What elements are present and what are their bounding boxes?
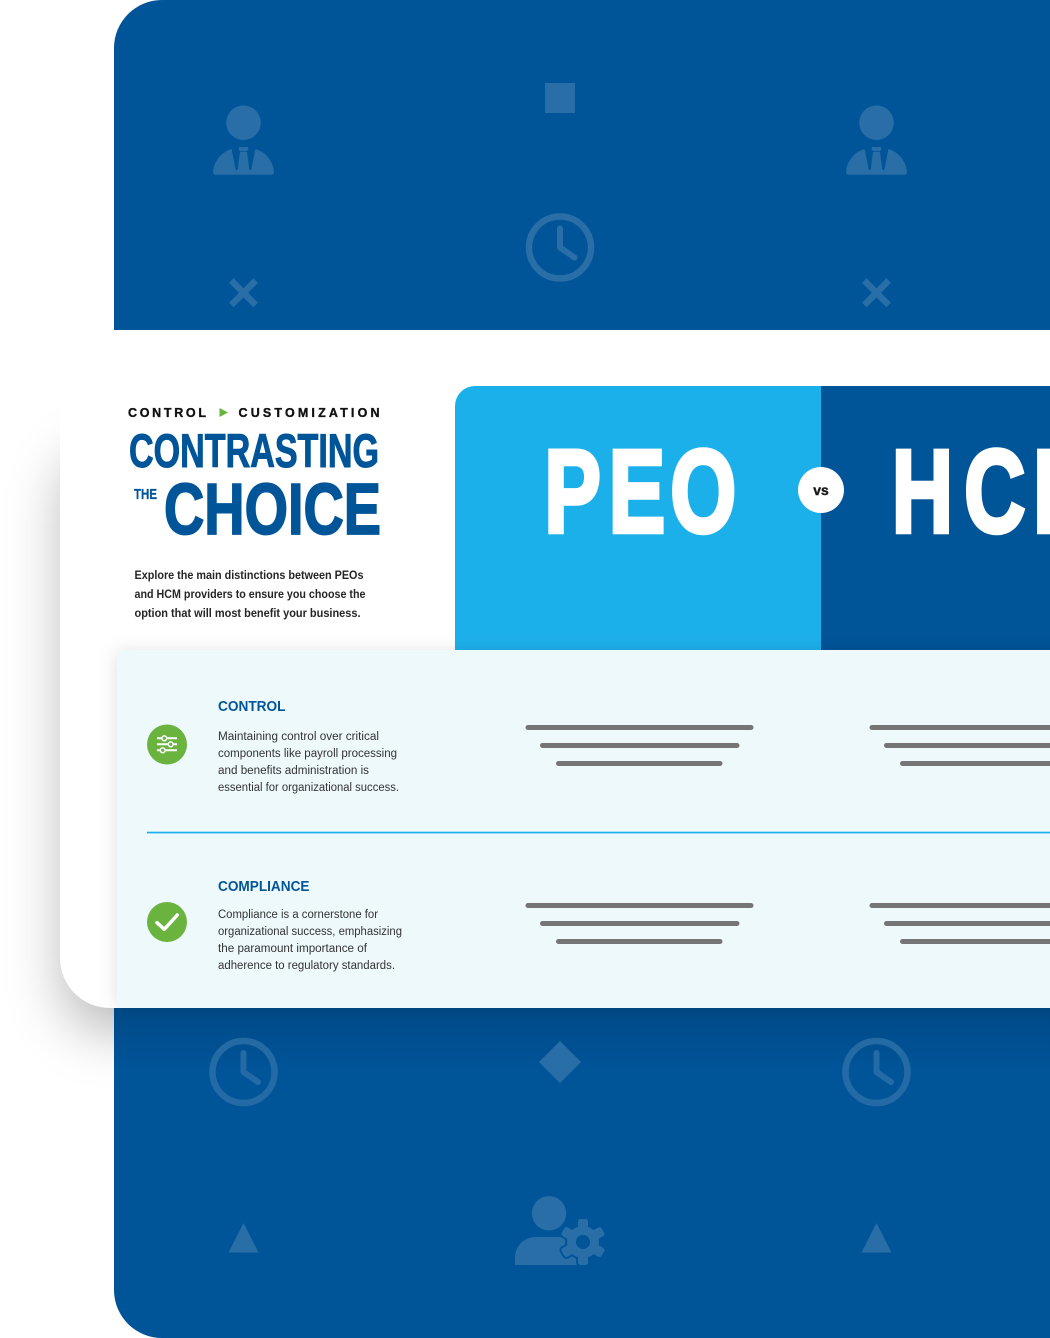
panel: top blue band: [114, 0, 1050, 330]
description: compliance: the paramount importance of: [218, 943, 368, 955]
panel: comparison table: [117, 650, 1050, 1008]
icon: businessperson left: [213, 105, 274, 175]
card shadow: [62, 450, 1050, 1032]
label: control: CONTROL: [218, 699, 286, 715]
eyebrow: control to customization: CONTROL: [128, 406, 206, 420]
heading: contrasting the choice: THE: [134, 486, 157, 503]
description: control: and benefits administration is: [218, 765, 369, 777]
panel: PEO header: PEO: [544, 425, 736, 557]
row: control: [147, 699, 1050, 794]
vs badge: vs: [813, 482, 829, 498]
description: control: [218, 731, 399, 794]
icon: diamond: [539, 1041, 581, 1083]
intro paragraph: option that will most benefit your business.: [134, 608, 360, 620]
heading: contrasting the choice: CHOICE: [164, 470, 381, 550]
description: compliance: organizational success, emphasizing: [218, 926, 402, 938]
icon: triangle left: [228, 1223, 258, 1252]
HCM placeholder lines: compliance: [872, 906, 1050, 942]
icon: businessperson right: [846, 105, 907, 175]
icon: cross left: [231, 281, 256, 305]
intro text block: [128, 406, 381, 620]
panel: bottom blue band: [114, 1008, 1050, 1338]
vs badge: [798, 467, 844, 513]
icon: cross right: [864, 281, 889, 305]
icon: person with gear: [515, 1196, 605, 1265]
panel: HCM header: [821, 386, 1050, 650]
description: compliance: adherence to regulatory standards.: [218, 960, 395, 972]
intro paragraph: Explore the main distinctions between PEOs: [134, 570, 364, 582]
icon: check mark: [147, 902, 187, 942]
intro paragraph: and HCM providers to ensure you choose the: [134, 589, 366, 601]
PEO placeholder lines: compliance: [528, 906, 751, 942]
comparison panel shadow: [117, 652, 1050, 1006]
eyebrow: control to customization: CUSTOMIZATION: [238, 406, 380, 420]
row: compliance: [147, 879, 1050, 972]
HCM placeholder lines: control: [872, 728, 1050, 764]
white card: [60, 330, 1050, 1008]
icon: clock right: [846, 1041, 908, 1103]
label: compliance: COMPLIANCE: [218, 879, 310, 895]
panel: PEO header: [455, 386, 821, 650]
icon: sliders: [147, 724, 187, 764]
intro paragraph: [134, 570, 366, 620]
icon: clock: [529, 216, 591, 278]
heading: contrasting the choice: [129, 424, 381, 550]
icon: square: [545, 83, 575, 113]
description: compliance: [218, 909, 402, 972]
description: control: Maintaining control over critical: [218, 731, 379, 743]
description: control: components like payroll processing: [218, 748, 397, 760]
heading: contrasting the choice: CONTRASTING: [129, 424, 379, 477]
description: control: essential for organizational success.: [218, 782, 399, 794]
icon: clock left: [212, 1041, 274, 1103]
icon: triangle right: [862, 1223, 892, 1252]
description: compliance: Compliance is a cornerstone for: [218, 909, 378, 921]
eyebrow: control to customization: [128, 406, 380, 420]
PEO placeholder lines: control: [528, 728, 751, 764]
